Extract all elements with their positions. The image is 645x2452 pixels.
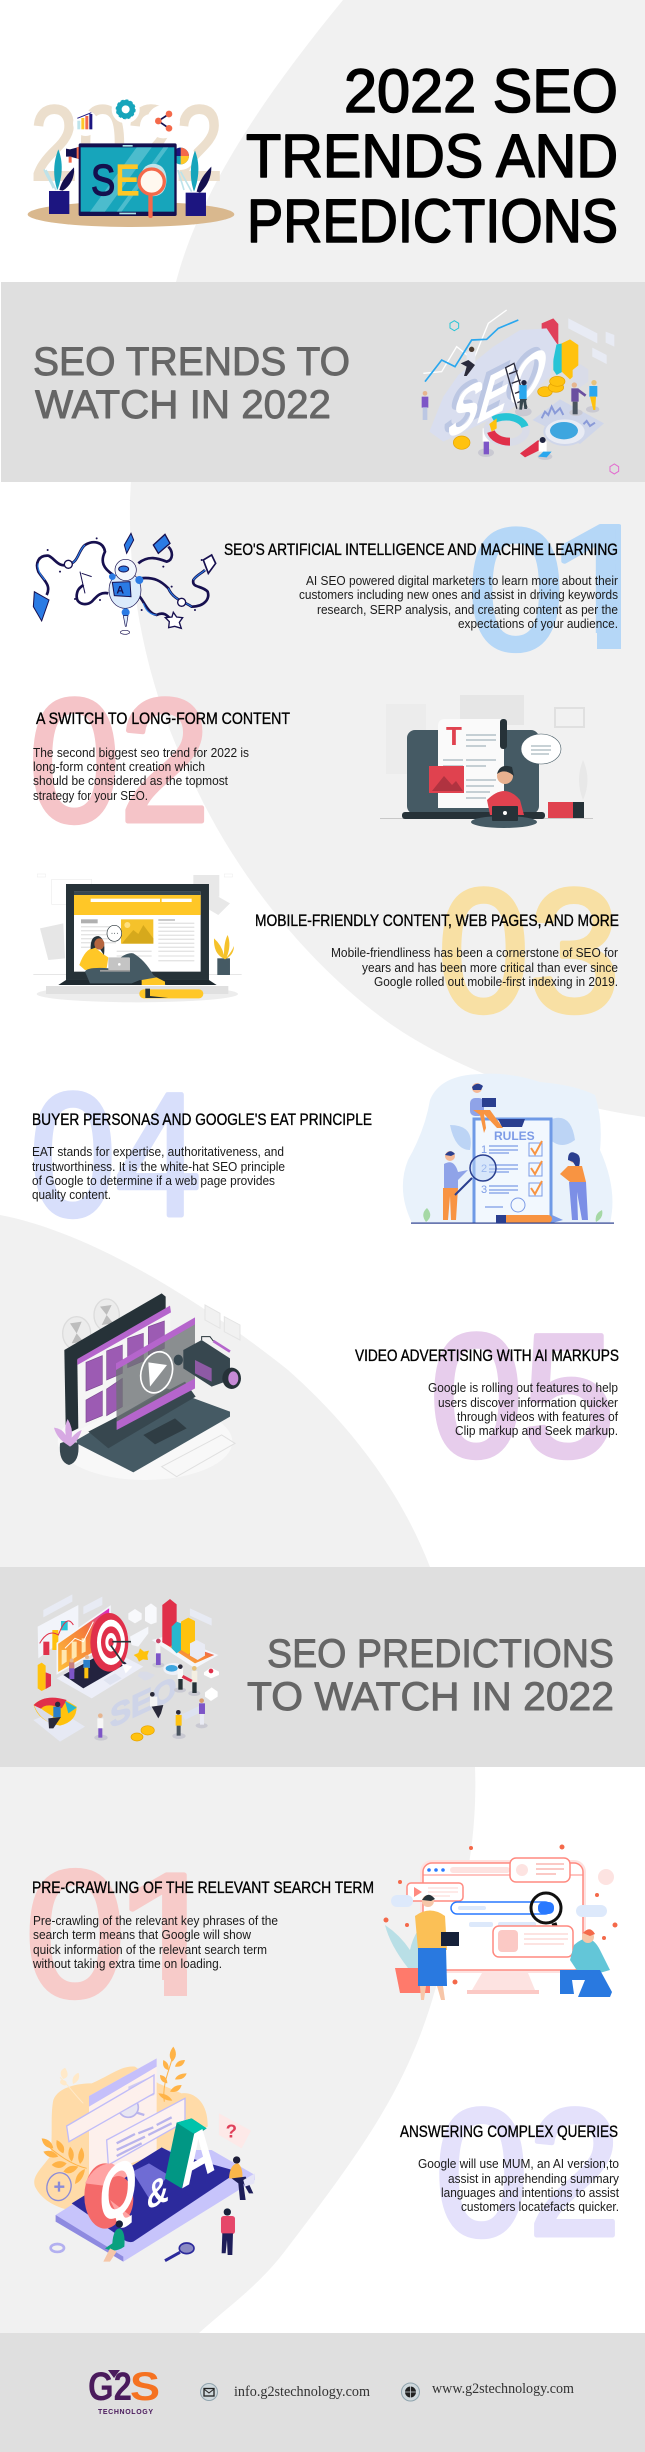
heading: SEO trends to watch xyxy=(33,340,350,427)
body text: without taking extra time on loading. xyxy=(32,1956,222,1971)
panel: prediction 01 xyxy=(30,1844,618,2000)
body text xyxy=(418,2156,619,2214)
number 02: 02 xyxy=(435,2072,621,2274)
number 01 xyxy=(30,1868,187,2000)
title xyxy=(246,57,618,255)
body text: Mobile-friendliness has been a cornerstone of SEO for xyxy=(331,945,619,960)
email address: info.g2stechnology.com xyxy=(234,2384,370,2400)
body text: should be considered as the topmost xyxy=(33,773,228,788)
number 04: 04 xyxy=(30,1058,201,1253)
body text xyxy=(299,573,619,631)
body text xyxy=(33,745,249,803)
body text: expectations of your audience. xyxy=(458,616,618,631)
icon: G2S Technology logo xyxy=(88,2365,160,2416)
body text: Clip markup and Seek markup. xyxy=(455,1423,618,1438)
icon: isometric target illustration: SEO xyxy=(110,1670,176,1736)
icon: woman with laptop and document xyxy=(380,695,593,828)
number 03: 03 xyxy=(438,854,620,1049)
body text: through videos with features of xyxy=(457,1409,618,1424)
icon: rules checklist with people: 2 xyxy=(481,1163,487,1175)
icon: search monitor with people xyxy=(384,1844,618,2000)
body text xyxy=(32,1144,285,1202)
icon: woman with laptop and document: T xyxy=(446,721,462,751)
website address: www.g2stechnology.com xyxy=(432,2381,574,2397)
heading: SEO trends to watch: SEO TRENDS TO xyxy=(33,340,350,384)
panel: trend 04 xyxy=(30,1058,614,1253)
body text: customers locatefacts quicker. xyxy=(461,2199,619,2214)
icon: email xyxy=(200,2384,218,2400)
heading: SEO predictions to watch: SEO PREDICTIONS xyxy=(267,1632,614,1676)
number 01 xyxy=(472,524,621,654)
icon: Q and A phone illustration: ? xyxy=(226,2120,237,2141)
number 01: 1 xyxy=(112,1838,229,2034)
heading: BUYER PERSONAS AND GOOGLE'S EAT PRINCIPLE xyxy=(32,1110,372,1129)
number 01: 0 xyxy=(468,494,564,686)
body text: long-form content creation which xyxy=(33,759,205,774)
icon: G2S Technology logo: S xyxy=(130,2365,160,2409)
body text: research, SERP analysis, and creating content as per the xyxy=(317,602,618,617)
icon: hero SEO laptop illustration: 2022 xyxy=(30,83,223,203)
heading: PRE-CRAWLING OF THE RELEVANT SEARCH TERM xyxy=(32,1878,374,1897)
panel: trend 01 xyxy=(33,488,645,687)
icon: Q and A phone illustration xyxy=(34,2047,255,2262)
panel: trend 03 xyxy=(33,854,620,1049)
icon: G2S Technology logo: G2 xyxy=(88,2365,132,2409)
icon: woman with monitor xyxy=(33,874,242,1002)
number 02: 02 xyxy=(29,664,210,859)
body text: The second biggest seo trend for 2022 is xyxy=(33,745,249,760)
number 01: 0 xyxy=(25,1834,125,2035)
body text: Google rolled out mobile-first indexing in 2019. xyxy=(374,974,618,989)
body text: years and has been more critical than ever since xyxy=(362,960,618,975)
body text: Pre-crawling of the relevant key phrases of the xyxy=(33,1913,278,1928)
icon: rules checklist with people: 1 xyxy=(481,1144,487,1156)
heading: A SWITCH TO LONG-FORM CONTENT xyxy=(36,709,290,728)
body text: languages and intentions to assist xyxy=(441,2185,619,2200)
icon: hero SEO laptop illustration: SEO xyxy=(91,157,168,205)
body text: users discover information quicker xyxy=(438,1395,619,1410)
body text: trustworthiness. It is the white-hat SEO principle xyxy=(32,1159,285,1174)
body text: quality content. xyxy=(32,1187,111,1202)
icon: AI robot: A xyxy=(116,584,124,596)
panel: prediction 02 xyxy=(34,2047,621,2274)
body text: search term means that Google will show xyxy=(33,1927,252,1942)
body text xyxy=(331,945,619,989)
icon: rules checklist with people: RULES xyxy=(494,1129,535,1143)
panel: footer xyxy=(0,2333,645,2452)
body text xyxy=(428,1380,619,1438)
panel: SEO trends band xyxy=(1,282,645,482)
icon: rules checklist with people: 3 xyxy=(481,1184,487,1196)
icon: Q and A phone illustration: A xyxy=(181,2107,216,2205)
title: 2022 SEO xyxy=(344,57,618,125)
body text: EAT stands for expertise, authoritativeness, and xyxy=(32,1144,284,1159)
body text: AI SEO powered digital marketers to learn more about their xyxy=(306,573,619,588)
number 05: 05 xyxy=(430,1299,615,1494)
icon: Q and A phone illustration: & xyxy=(147,2165,169,2219)
title: TRENDS AND xyxy=(246,122,618,190)
heading: SEO predictions to watch xyxy=(247,1632,614,1719)
icon: isometric SEO illustration: SEO xyxy=(440,329,556,456)
body text: assist in apprehending summary xyxy=(448,2171,619,2186)
icon: rules checklist with people xyxy=(403,1074,614,1224)
panel: trend 02 xyxy=(29,664,593,859)
icon: isometric target illustration xyxy=(33,1594,219,1742)
body text: Google will use MUM, an AI version,to xyxy=(418,2156,619,2171)
body text: quick information of the relevant search term xyxy=(33,1942,267,1957)
panel: trend 05 xyxy=(54,1293,619,1494)
icon: G2S Technology logo: TECHNOLOGY xyxy=(98,2409,153,2416)
heading: SEO trends to watch: WATCH IN 2022 xyxy=(35,383,331,427)
body text: strategy for your SEO. xyxy=(33,788,148,803)
icon: Q and A phone illustration: Q xyxy=(100,2138,137,2244)
body text: Google is rolling out features to help xyxy=(428,1380,618,1395)
panel: SEO predictions band xyxy=(0,1567,645,1767)
heading: SEO predictions to watch: TO WATCH IN 2022 xyxy=(247,1675,614,1719)
icon: isometric SEO illustration xyxy=(422,310,619,474)
body text: of Google to determine if a web page provides xyxy=(32,1173,275,1188)
body text xyxy=(32,1913,278,1971)
icon: video laptop with camera xyxy=(54,1293,241,1480)
icon: isometric SEO illustration: SEO xyxy=(436,326,552,453)
icon: AI robot xyxy=(33,533,216,634)
icon: globe xyxy=(402,2383,420,2401)
body text: customers including new ones and assist in driving keywords xyxy=(299,587,618,602)
